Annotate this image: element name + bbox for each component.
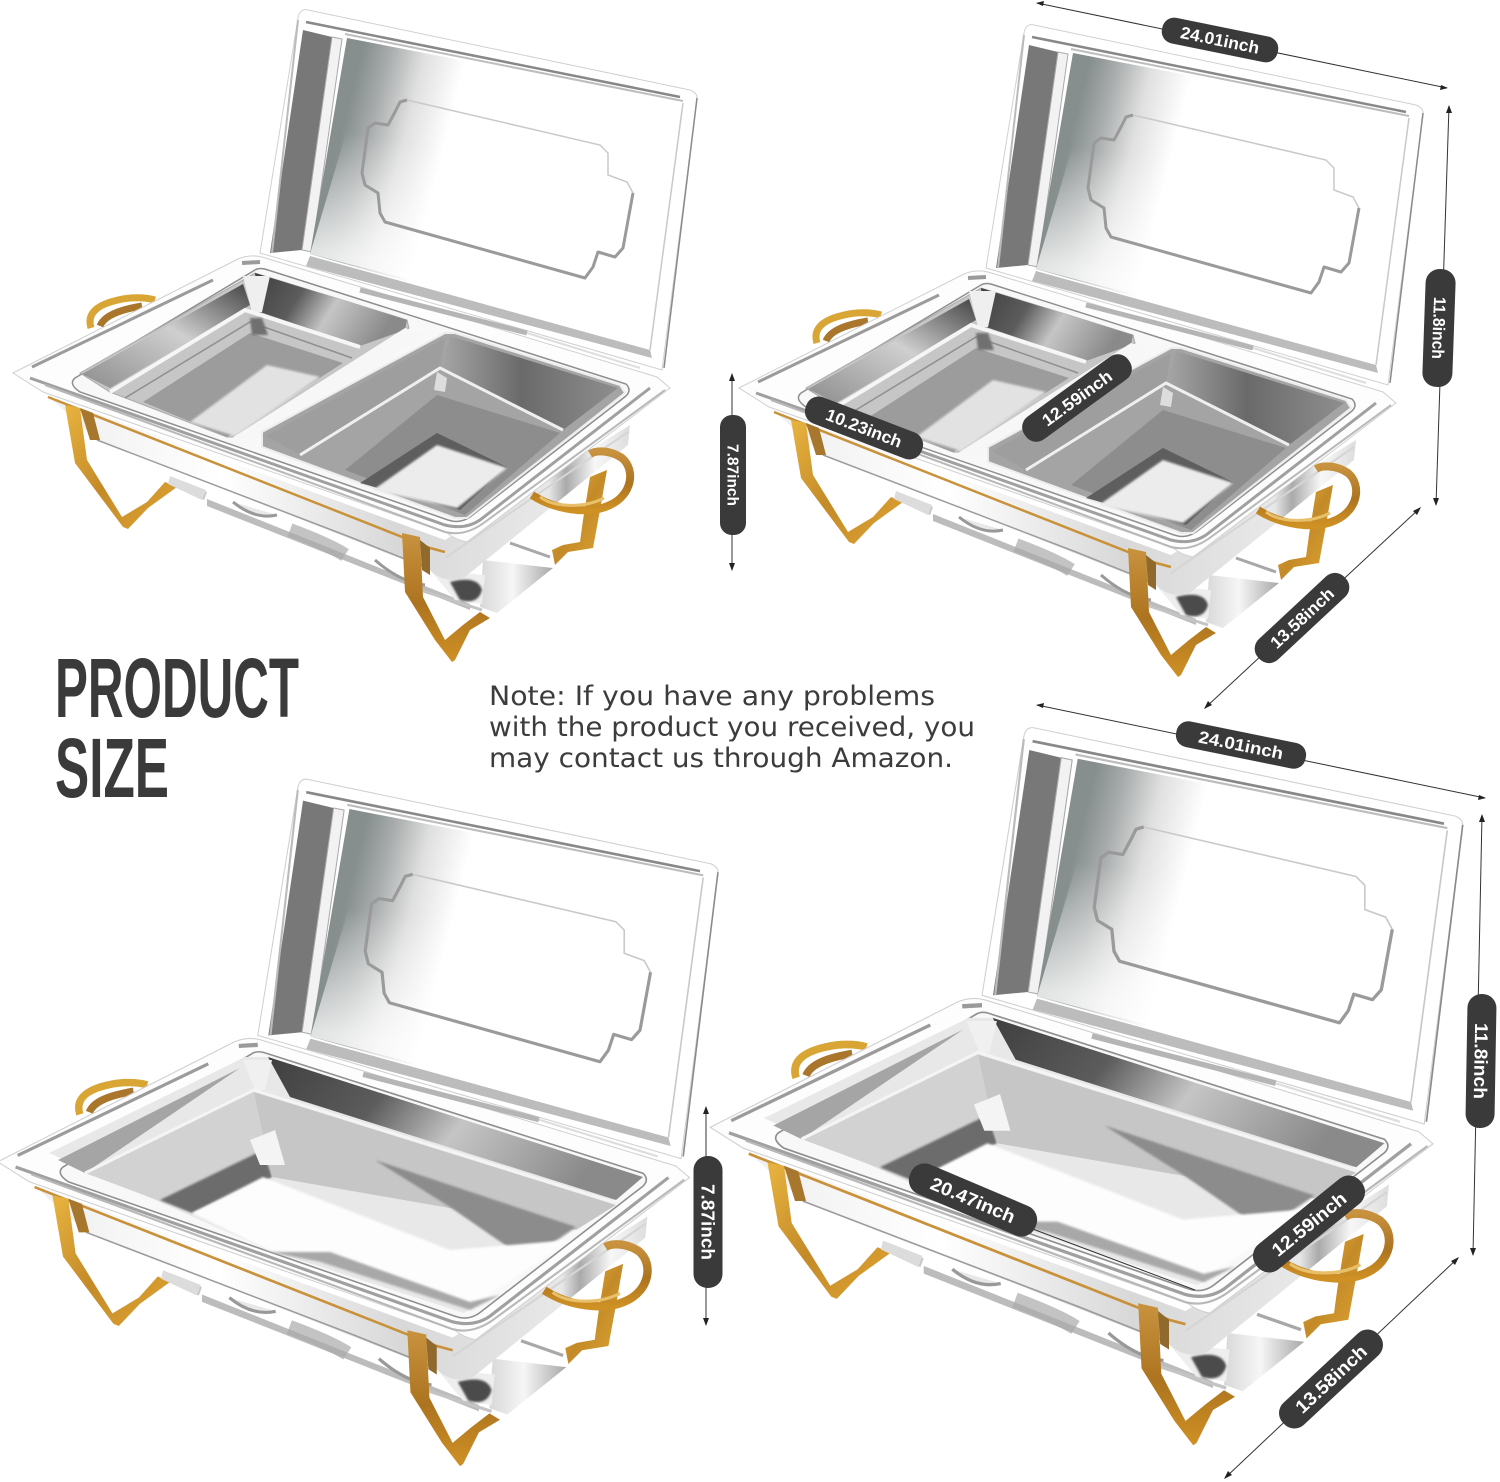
rim bbox=[739, 271, 1396, 557]
lid bbox=[258, 779, 718, 1159]
stand and tray bbox=[795, 1045, 1364, 1391]
dimension: top right width 24.01 inch bbox=[1036, 1, 1448, 90]
dimension: top right pan length 10.23 inch: 10.23inch bbox=[823, 405, 905, 452]
heading: product size bbox=[55, 641, 299, 815]
heading: product size: PRODUCT bbox=[55, 641, 299, 735]
lid bbox=[986, 25, 1423, 385]
body, gold legs and handle bbox=[35, 1186, 648, 1466]
panel: two-pan chafing dish, top left bbox=[13, 10, 697, 662]
note text: may contact us through Amazon. bbox=[489, 743, 953, 774]
dimension: bottom right width 24.01 inch: 24.01inch bbox=[1197, 728, 1285, 763]
dimension: top right depth 13.58 inch bbox=[1204, 507, 1421, 709]
single food pan bbox=[49, 1057, 643, 1313]
rim bbox=[0, 1038, 690, 1340]
dimension: bottom right pan width 12.59 inch: 12.59inch bbox=[1267, 1188, 1351, 1260]
dimension: bottom right pan length 20.47 inch bbox=[904, 1159, 1195, 1290]
dimension: bottom right height 11.8 inch: 11.8inch bbox=[1470, 1023, 1492, 1099]
dimension: top right depth 13.58 inch: 13.58inch bbox=[1267, 584, 1338, 653]
note text: with the product you received, you bbox=[489, 712, 975, 743]
body, gold legs and handle bbox=[774, 411, 1356, 677]
dimension: top right width 24.01 inch: 24.01inch bbox=[1179, 23, 1261, 58]
panel: single-pan chafing dish with dimensions, bottom right bbox=[710, 728, 1463, 1445]
dimension: bottom right pan width 12.59 inch bbox=[1247, 1169, 1371, 1279]
note text bbox=[489, 681, 975, 774]
heading: product size: SIZE bbox=[55, 721, 169, 815]
body, gold legs and handle bbox=[48, 396, 630, 662]
dimension: top right leg height 7.87 inch: 7.87inch bbox=[724, 444, 740, 506]
dimension: top right height 11.8 inch: 11.8inch bbox=[1428, 297, 1449, 359]
rim bbox=[13, 256, 670, 542]
panel: two-pan chafing dish with dimensions, top right bbox=[739, 25, 1423, 677]
note text: Note: If you have any problems bbox=[489, 681, 935, 712]
dimension: top right pan width 12.59 inch bbox=[1017, 349, 1137, 447]
dimension: top right pan length 10.23 inch bbox=[801, 393, 927, 463]
lid bbox=[982, 728, 1463, 1124]
body, gold legs and handle bbox=[749, 1153, 1389, 1445]
rim bbox=[710, 998, 1433, 1313]
stand and tray bbox=[90, 298, 607, 613]
dimension: top right height 11.8 inch bbox=[1422, 105, 1456, 506]
stand and tray bbox=[816, 313, 1333, 628]
dimension: bottom left leg height 7.87 inch: 7.87inch bbox=[698, 1184, 718, 1260]
two food pans bbox=[806, 288, 1351, 533]
dimension: bottom right depth 13.58 inch: 13.58inch bbox=[1291, 1341, 1371, 1417]
dimension: bottom right height 11.8 inch bbox=[1465, 814, 1497, 1256]
two food pans bbox=[80, 273, 625, 518]
dimension: bottom left leg height 7.87 inch bbox=[694, 1106, 722, 1326]
dimension: top right pan width 12.59 inch: 12.59inch bbox=[1039, 367, 1116, 430]
dimension: bottom right pan length 20.47 inch: 20.47inch bbox=[927, 1173, 1019, 1227]
dimension: top right leg height 7.87 inch bbox=[720, 373, 746, 571]
panel: single-pan chafing dish, bottom left bbox=[0, 779, 718, 1466]
lid bbox=[260, 10, 697, 370]
dimension: bottom right width 24.01 inch bbox=[1036, 703, 1486, 800]
single food pan bbox=[764, 1018, 1384, 1285]
stand and tray bbox=[79, 1083, 623, 1414]
dimension: bottom right depth 13.58 inch bbox=[1224, 1257, 1459, 1479]
